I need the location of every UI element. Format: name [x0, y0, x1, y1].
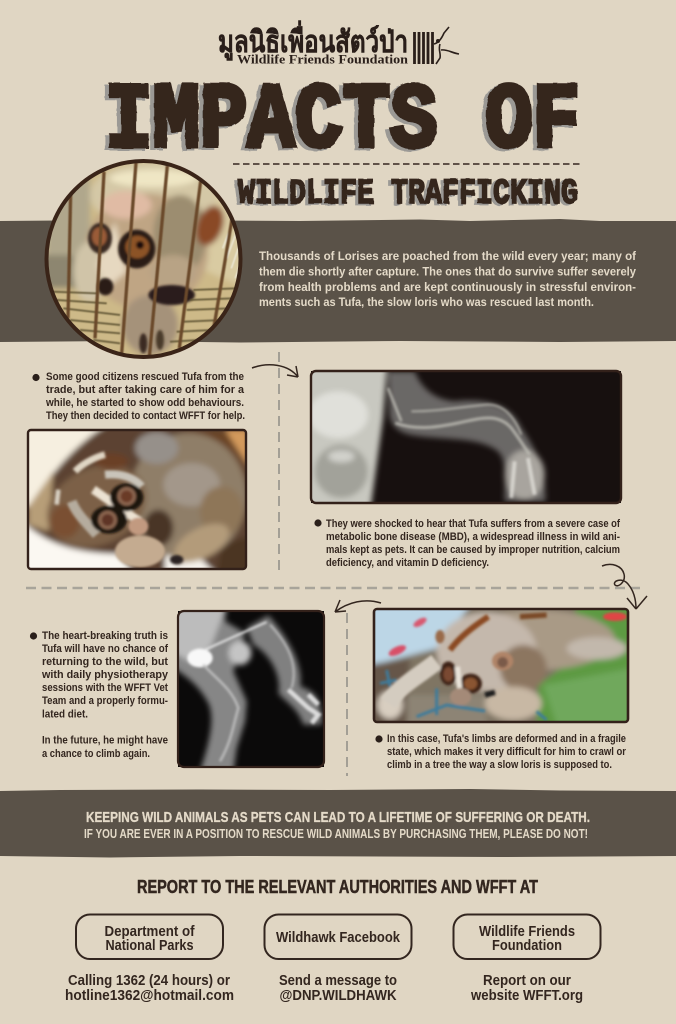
logo english name: Wildlife Friends Foundation	[237, 52, 408, 66]
text: limbs deformed: state, which makes it very difficult for him to crawl or	[387, 746, 626, 758]
intro paragraph: ments such as Tufa, the slow loris who was rescued last month.	[259, 295, 594, 309]
photo: loris on grass	[372, 608, 630, 724]
dashed divider	[233, 163, 580, 165]
contact: wildlife friends foundation: Wildlife Friends	[479, 924, 575, 940]
photo: loris in blanket	[26, 428, 248, 570]
top dark band	[0, 219, 676, 342]
text: metabolic bone disease: metabolic bone disease (MBD), a widespread illness in wild ani-	[326, 531, 620, 543]
text: limbs deformed: climb in a tree the way a slow loris is supposed to.	[387, 759, 612, 771]
subtitle: wildlife trafficking: WILDLIFE TRAFFICKING	[238, 174, 578, 214]
panel: warning band	[0, 789, 676, 858]
cage floor wires	[53, 288, 237, 343]
arrow: to second x-ray	[335, 600, 381, 612]
text: good citizens: Some good citizens rescued Tufa from the	[46, 371, 244, 383]
text: heart-breaking truth: a chance to climb again.	[42, 748, 150, 760]
text: metabolic bone disease: deficiency, and vitamin D deficiency.	[326, 557, 489, 569]
arrow: to x-ray	[252, 365, 298, 377]
contact: wildlife friends foundation: Report on our	[483, 973, 571, 989]
text: heart-breaking truth: returning to the wild, but	[42, 656, 168, 668]
text: good citizens: trade, but after taking care of him for a	[46, 384, 245, 396]
text: metabolic bone disease	[314, 518, 620, 569]
x-ray: limb	[310, 370, 622, 504]
text: limbs deformed: In this case, Tufa's limbs are deformed and in a fragile	[387, 733, 626, 745]
text: good citizens: while, he started to show odd behaviours.	[45, 397, 244, 409]
text: heart-breaking truth: with daily physiotherapy	[41, 669, 169, 681]
text: heart-breaking truth: Team and a properly formu-	[42, 695, 168, 707]
text: heart-breaking truth: lated diet.	[42, 708, 88, 720]
contact: department of national parks: Calling 1362 (24 hours) or	[68, 973, 230, 989]
contact: wildlife friends foundation	[454, 914, 600, 1004]
contact: department of national parks	[65, 914, 234, 1004]
contact: wildhawk facebook: Wildhawk Facebook	[276, 930, 401, 946]
intro paragraph: them die shortly after capture. The ones that do survive suffer severely	[259, 264, 636, 278]
intro paragraph	[259, 249, 637, 309]
icon: caged gibbon	[414, 27, 459, 64]
arrow: squiggle down	[602, 564, 647, 609]
text: limbs deformed	[375, 733, 626, 771]
intro paragraph: Thousands of Lorises are poached from the wild every year; many of	[259, 249, 637, 263]
text: heart-breaking truth: The heart-breaking truth is	[42, 630, 168, 642]
text: metabolic bone disease: mals kept as pets. It can be caused by improper nutrition, calcium	[326, 544, 620, 556]
cage side wires	[222, 232, 238, 279]
contact: department of national parks: National Parks	[106, 938, 194, 954]
photo: caged loris in circle	[40, 155, 250, 365]
x-ray: deformed legs	[172, 605, 324, 771]
text: heart-breaking truth	[30, 630, 169, 760]
contact: wildlife friends foundation: website WFFT.org	[470, 988, 583, 1004]
contact: department of national parks: hotline1362@hotmail.com	[65, 988, 234, 1004]
contact: wildhawk facebook	[264, 914, 412, 1004]
text: metabolic bone disease: They were shocked to hear that Tufa suffers from a severe case of	[326, 518, 620, 530]
title: impacts of: IMPACTS OF	[105, 69, 580, 174]
text: good citizens: They then decided to contact WFFT for help.	[46, 410, 245, 422]
text: heart-breaking truth: In the future, he might have	[42, 734, 168, 746]
contact: wildhawk facebook: @DNP.WILDHAWK	[280, 988, 397, 1004]
text: heart-breaking truth: Tufa will have no chance of	[42, 643, 168, 655]
text: good citizens	[32, 371, 245, 422]
heading: report: REPORT TO THE RELEVANT AUTHORITIES AND WFFT AT	[137, 876, 539, 897]
contact: wildlife friends foundation: Foundation	[492, 938, 562, 954]
logo thai name: มูลนิธิเพื่อนสัตว์ป่า	[218, 20, 408, 61]
cage bars	[68, 162, 233, 357]
logo	[218, 20, 459, 66]
text: heart-breaking truth: sessions with the WFFT Vet	[42, 682, 168, 694]
intro paragraph: from health problems and are kept continuously in stressful environ-	[259, 280, 636, 294]
contact: wildhawk facebook: Send a message to	[279, 973, 397, 989]
contact: department of national parks: Department of	[104, 924, 195, 940]
